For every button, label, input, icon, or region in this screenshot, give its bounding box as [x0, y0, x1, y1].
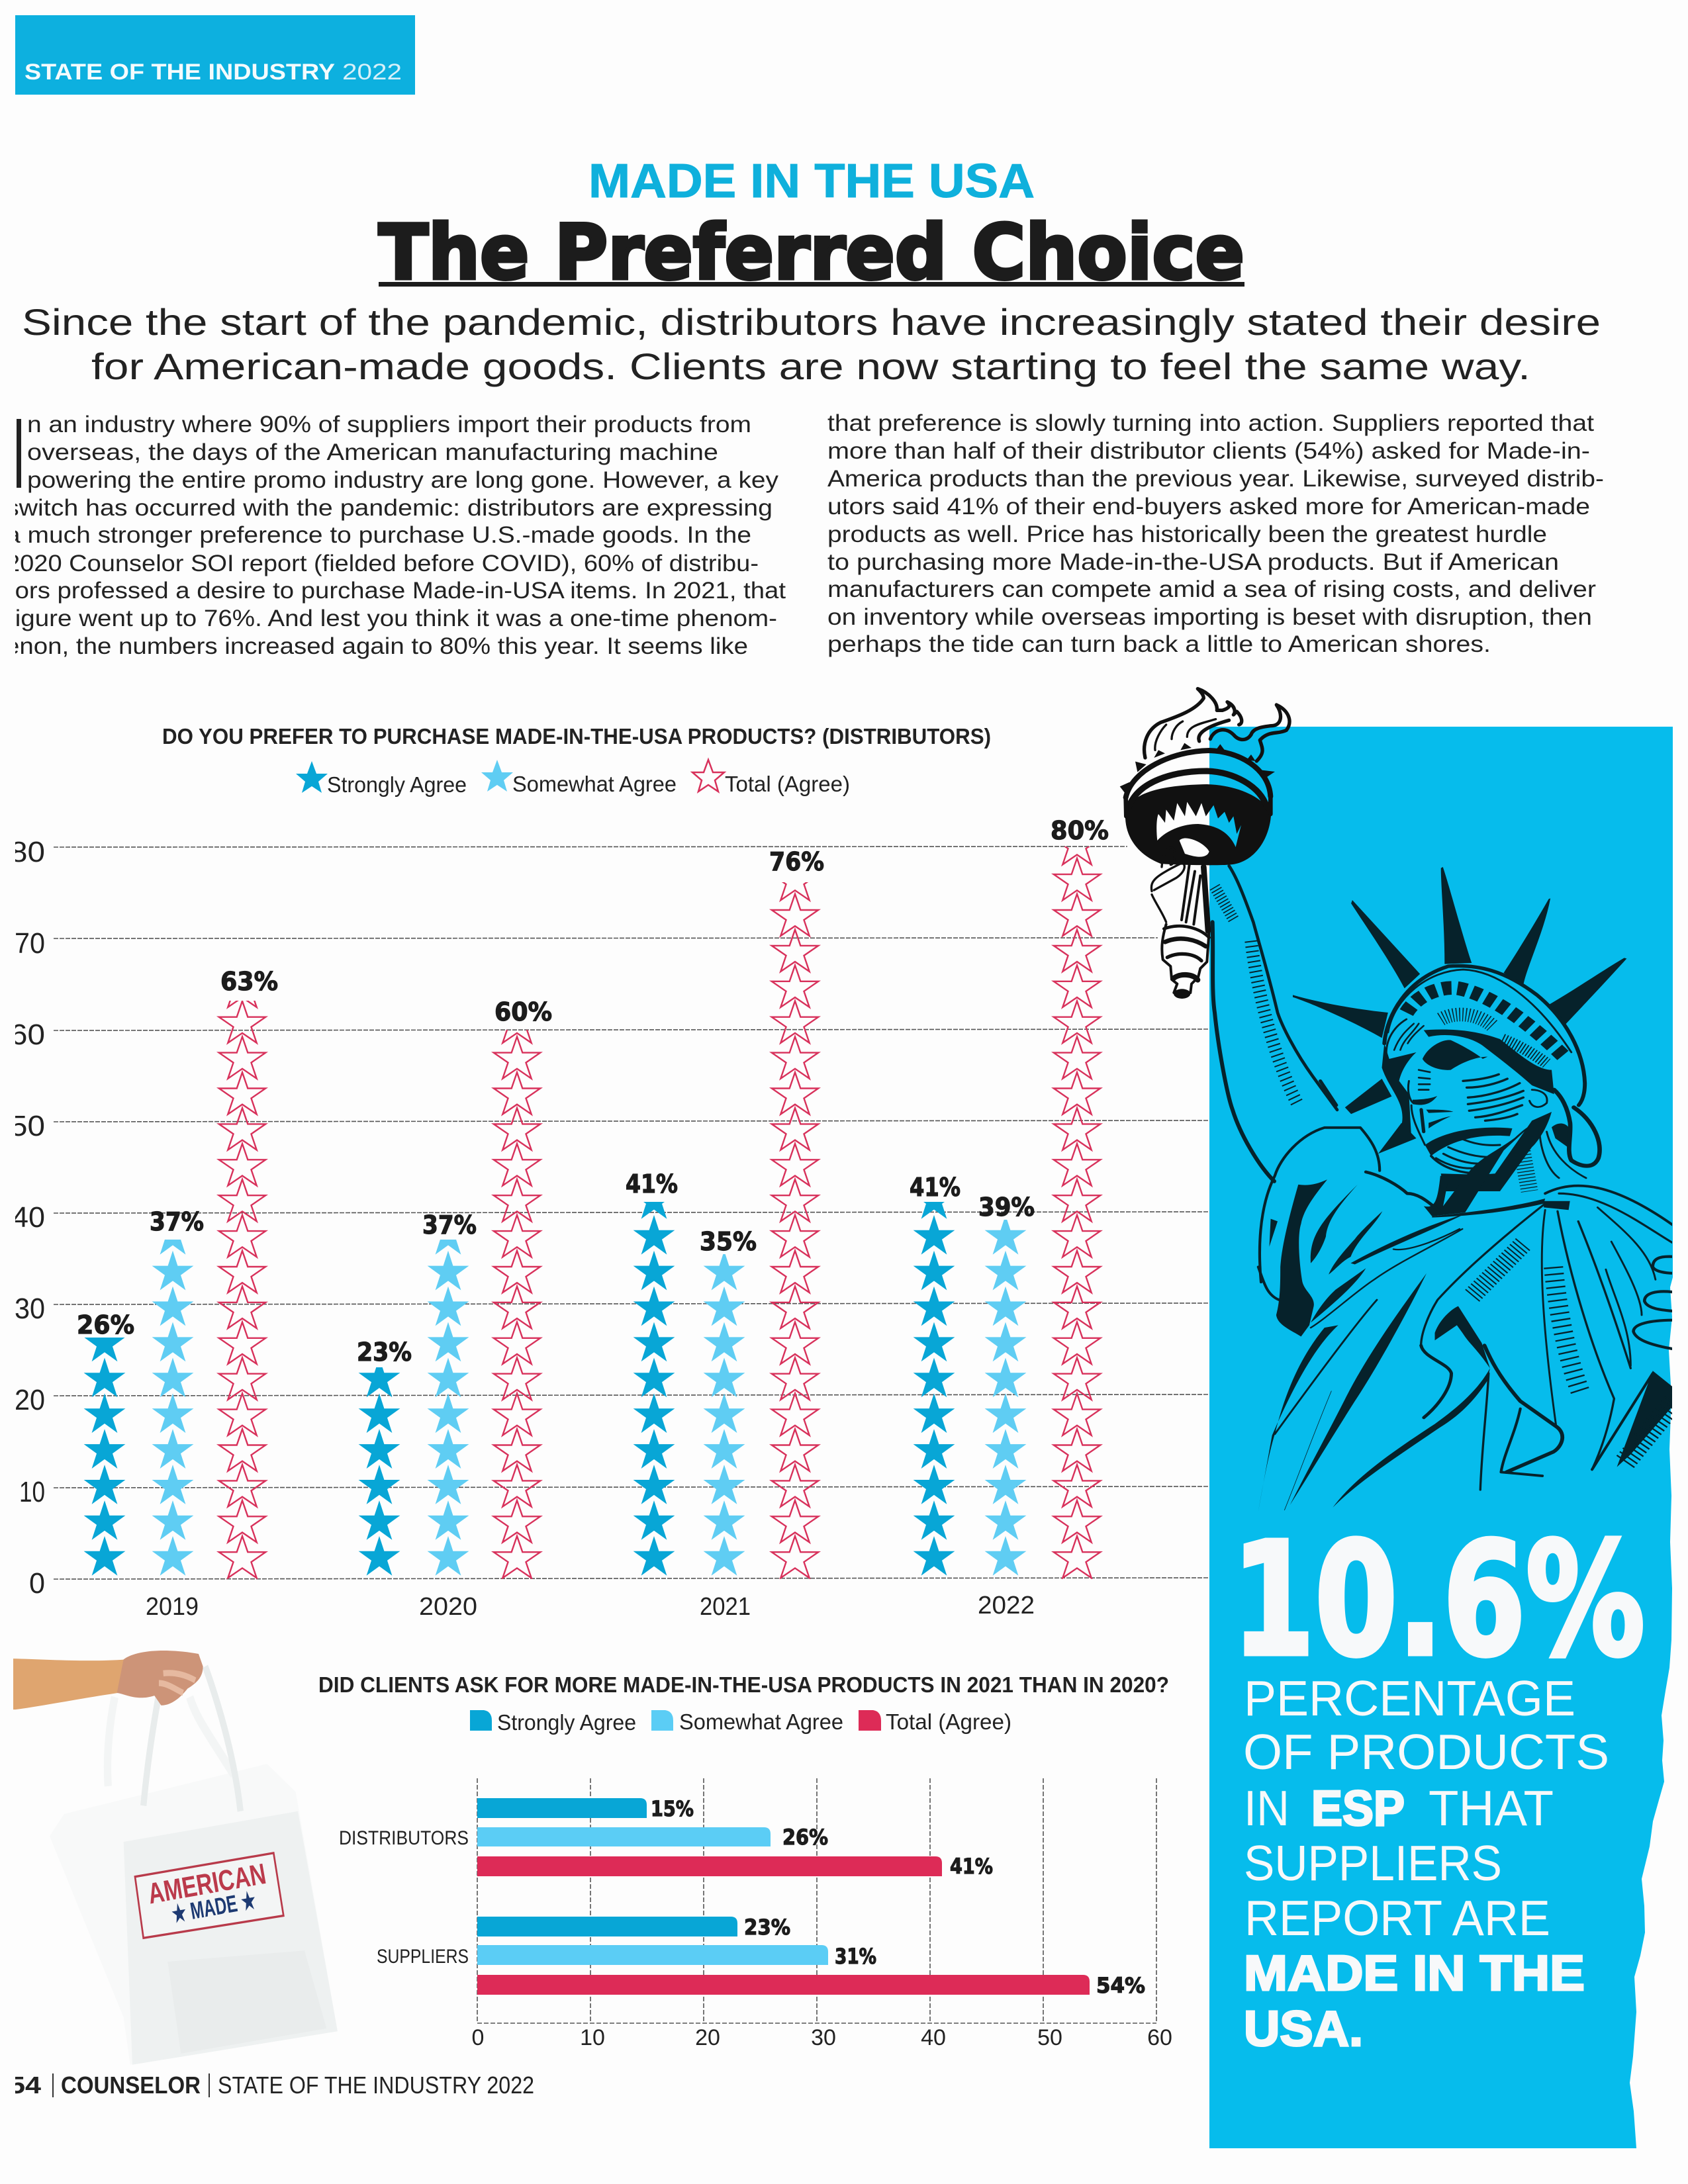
body column: right: products as well. Price has historically been the greatest hurdle: [827, 522, 1547, 547]
star columns: 2020: 23%: [357, 1338, 412, 1367]
body column: left: n an industry where 90% of suppliers import their products from: [27, 412, 751, 437]
bag label text: AMERICAN: [146, 1858, 269, 1910]
callout text: ESP: [1311, 1780, 1405, 1836]
bar chart legend: Total (Agree): [886, 1709, 1011, 1734]
bar group: suppliers: 23%: [744, 1915, 790, 1940]
star columns: 2020: 2020: [419, 1593, 477, 1621]
section tag: STATE OF THE INDUSTRY: [24, 60, 335, 85]
bar group: distributors: 26%: [782, 1825, 828, 1850]
bar group: suppliers: [377, 1915, 1145, 1998]
statue of liberty illustration: [1120, 689, 1675, 1512]
icon: torch: [1120, 689, 1337, 1181]
body column: left: a much stronger preference to purchase U.S.-made goods. In the: [6, 522, 751, 548]
subheading: [22, 301, 1601, 387]
title: The Preferred Choice: [379, 208, 1244, 296]
body column: right: perhaps the tide can turn back a little to American shores.: [827, 631, 1491, 657]
body column: right: on inventory while overseas importing is beset with disruption, then: [827, 604, 1592, 630]
star columns: 2021: [626, 823, 824, 1621]
section tag: 2022: [342, 60, 402, 85]
body column: right: manufacturers can compete amid a sea of rising costs, and deliver: [827, 576, 1596, 602]
footer: 54: [9, 2071, 41, 2099]
footer: STATE OF THE INDUSTRY 2022: [218, 2071, 534, 2099]
bag and hand photo: [13, 1651, 338, 2065]
bag label text: ★ MADE ★: [169, 1886, 258, 1928]
star chart y axis labels: 40: [12, 1201, 45, 1234]
star columns: 2019: [78, 970, 278, 1615]
star columns: 2020: 60%: [494, 997, 552, 1026]
kicker heading: MADE IN THE USA: [588, 155, 1035, 208]
star chart y axis labels: 70: [15, 927, 45, 960]
icon: draped robe: [1258, 1125, 1675, 1512]
body column: left: tors professed a desire to purchase Made-in-USA items. In 2021, that: [8, 578, 786, 604]
bar chart gridlines: [477, 1778, 1156, 2023]
star columns: 2021: 76%: [769, 847, 824, 876]
star columns: 2022: 39%: [978, 1193, 1035, 1222]
star columns: 2020: [358, 1001, 552, 1615]
star columns: 2019: 37%: [150, 1207, 204, 1236]
star columns: 2021: 2021: [700, 1593, 751, 1621]
body column: left: overseas, the days of the American manufacturing machine: [27, 439, 718, 465]
star chart y axis labels: 20: [15, 1384, 45, 1416]
callout text: REPORT ARE: [1244, 1890, 1550, 1946]
body column: left: switch has occurred with the pandemic: distributors are expressing: [6, 495, 773, 521]
bar chart x axis labels: [472, 2025, 1172, 2050]
callout text: PERCENTAGE: [1244, 1670, 1575, 1726]
star chart y axis labels: 50: [10, 1110, 45, 1142]
body column: right: [827, 410, 1604, 657]
bar group: suppliers: SUPPLIERS: [377, 1946, 469, 1968]
bag label text: [146, 1858, 272, 1931]
star columns: 2019: 26%: [77, 1310, 134, 1340]
body column: left: figure went up to 76%. And lest you think it was a one-time phenom-: [8, 606, 777, 631]
callout text: USA.: [1244, 2001, 1363, 2056]
bar chart legend: Somewhat Agree: [679, 1709, 843, 1734]
star columns: 2019: 2019: [146, 1593, 199, 1621]
body column: left: 2020 Counselor SOI report (fielded before COVID), 60% of distribu-: [6, 551, 759, 576]
star chart legend: [296, 760, 850, 797]
subheading: for American-made goods. Clients are now starting to feel the same way.: [91, 345, 1530, 387]
bag body: [13, 1651, 338, 2065]
body column: right: America products than the previous year. Likewise, surveyed distrib-: [827, 466, 1604, 492]
body column: right: utors said 41% of their end-buyers asked more for American-made: [827, 494, 1590, 520]
star columns: 2021: 35%: [700, 1227, 757, 1256]
star chart legend: Strongly Agree: [327, 772, 467, 797]
star columns: 2021: 41%: [626, 1169, 678, 1199]
callout text: IN: [1244, 1780, 1289, 1836]
bar chart x axis labels: 60: [1147, 2025, 1172, 2050]
star chart gridlines: [54, 846, 1209, 1579]
footer: [15, 2073, 534, 2097]
blue callout panel: [1209, 727, 1673, 2148]
section tag: [15, 15, 415, 95]
star columns: 2022: 2022: [978, 1592, 1035, 1619]
bar chart x axis labels: 30: [811, 2025, 836, 2050]
body column: left: powering the entire promo industry are long gone. However, a key: [27, 467, 779, 493]
star chart y axis labels: 30: [15, 1293, 45, 1325]
star columns: 2022: 80%: [1051, 816, 1109, 845]
footer: COUNSELOR: [61, 2071, 201, 2099]
star chart title: DO YOU PREFER TO PURCHASE MADE-IN-THE-USA PRODUCTS? (DISTRIBUTORS): [162, 724, 991, 749]
bar group: suppliers: 54%: [1096, 1973, 1145, 1998]
subheading: Since the start of the pandemic, distributors have increasingly stated their desire: [22, 301, 1601, 343]
star chart y axis labels: 80: [10, 836, 45, 868]
star chart legend: Total (Agree): [725, 772, 850, 796]
body column: left: enon, the numbers increased again to 80% this year. It seems like: [5, 633, 748, 659]
star chart y axis labels: 0: [29, 1567, 45, 1600]
callout text: SUPPLIERS: [1244, 1835, 1502, 1891]
body column: left: [5, 412, 786, 659]
star chart y axis labels: 10: [19, 1476, 45, 1508]
callout text: MADE IN THE: [1244, 1945, 1585, 2001]
bar group: distributors: [339, 1796, 993, 1879]
bar chart legend: [470, 1709, 1011, 1735]
star columns: 2020: 37%: [422, 1210, 477, 1240]
bar chart x axis labels: 20: [695, 2025, 720, 2050]
bar chart x axis labels: 10: [580, 2025, 605, 2050]
bar chart x axis labels: 0: [472, 2025, 484, 2050]
star chart y axis labels: [15, 842, 44, 1594]
body column: right: to purchasing more Made-in-the-USA products. But if American: [827, 549, 1559, 575]
bar chart x axis labels: 50: [1037, 2025, 1062, 2050]
bar group: distributors: 41%: [950, 1854, 993, 1879]
star columns: 2022: [910, 816, 1109, 1619]
bar chart x axis labels: 40: [921, 2025, 946, 2050]
bar group: distributors: DISTRIBUTORS: [339, 1827, 469, 1849]
body column: right: more than half of their distributor clients (54%) asked for Made-in-: [827, 438, 1590, 464]
bar group: suppliers: 31%: [835, 1944, 876, 1969]
star chart legend: Somewhat Agree: [512, 772, 677, 796]
icon: crowned head: [1293, 867, 1626, 1191]
callout text: [1243, 1670, 1609, 2056]
bar group: distributors: 15%: [651, 1796, 694, 1821]
callout text: THAT: [1429, 1780, 1554, 1836]
bar chart legend: Strongly Agree: [497, 1710, 636, 1735]
star chart y axis labels: 60: [10, 1019, 45, 1051]
star columns: 2022: 41%: [910, 1173, 961, 1202]
body column: right: that preference is slowly turning into action. Suppliers reported that: [827, 410, 1594, 436]
bar chart title: DID CLIENTS ASK FOR MORE MADE-IN-THE-USA PRODUCTS IN 2021 THAN IN 2020?: [318, 1672, 1169, 1697]
star columns: 2019: 63%: [220, 967, 278, 996]
callout text: OF PRODUCTS: [1243, 1724, 1609, 1780]
